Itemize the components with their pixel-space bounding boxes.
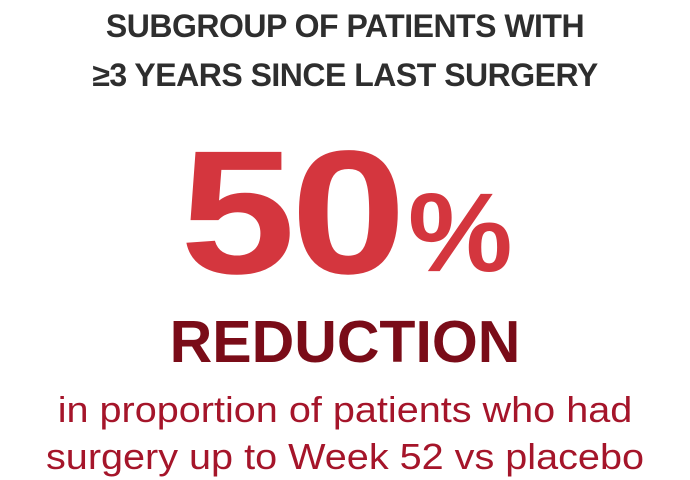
reduction heading: REDUCTION xyxy=(170,309,520,375)
title: ≥3 YEARS SINCE LAST SURGERY xyxy=(92,57,598,93)
description: surgery up to Week 52 vs placebo xyxy=(46,436,644,477)
description xyxy=(46,389,644,477)
title xyxy=(92,8,598,93)
title: SUBGROUP OF PATIENTS WITH xyxy=(106,8,584,44)
big number xyxy=(180,115,513,311)
description: in proportion of patients who had xyxy=(58,389,632,430)
digits 50: 50 xyxy=(180,115,402,311)
percent sign: % xyxy=(408,170,513,295)
